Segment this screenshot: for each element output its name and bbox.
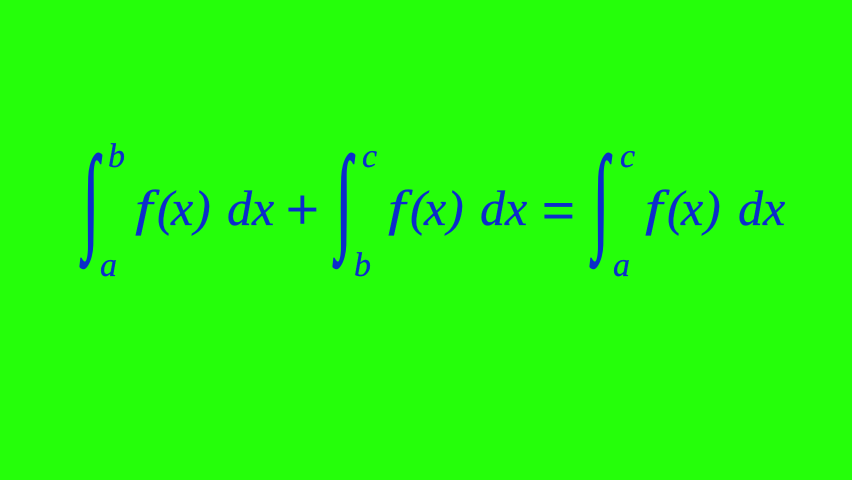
equals sign: = [542, 178, 575, 243]
dx: dx [227, 180, 274, 236]
plus sign: + [286, 177, 319, 242]
first integral term [80, 133, 274, 284]
dx: dx [480, 180, 527, 236]
(x): (x) [410, 180, 464, 236]
upper limit c: c [362, 138, 377, 175]
third integral term [590, 133, 785, 284]
(x): (x) [157, 180, 211, 236]
lower limit b: b [354, 247, 371, 284]
(x): (x) [667, 180, 721, 236]
function f: f [645, 182, 670, 236]
dx: dx [738, 180, 785, 236]
upper limit b: b [108, 138, 125, 175]
integral sign: ∫ [80, 133, 102, 269]
second integral term [333, 133, 527, 284]
integral sign: ∫ [333, 133, 355, 269]
function f: f [135, 182, 160, 236]
lower limit a: a [613, 247, 630, 284]
function f: f [388, 182, 413, 236]
lower limit a: a [100, 247, 117, 284]
upper limit c: c [620, 138, 635, 175]
integral sign: ∫ [590, 133, 612, 269]
